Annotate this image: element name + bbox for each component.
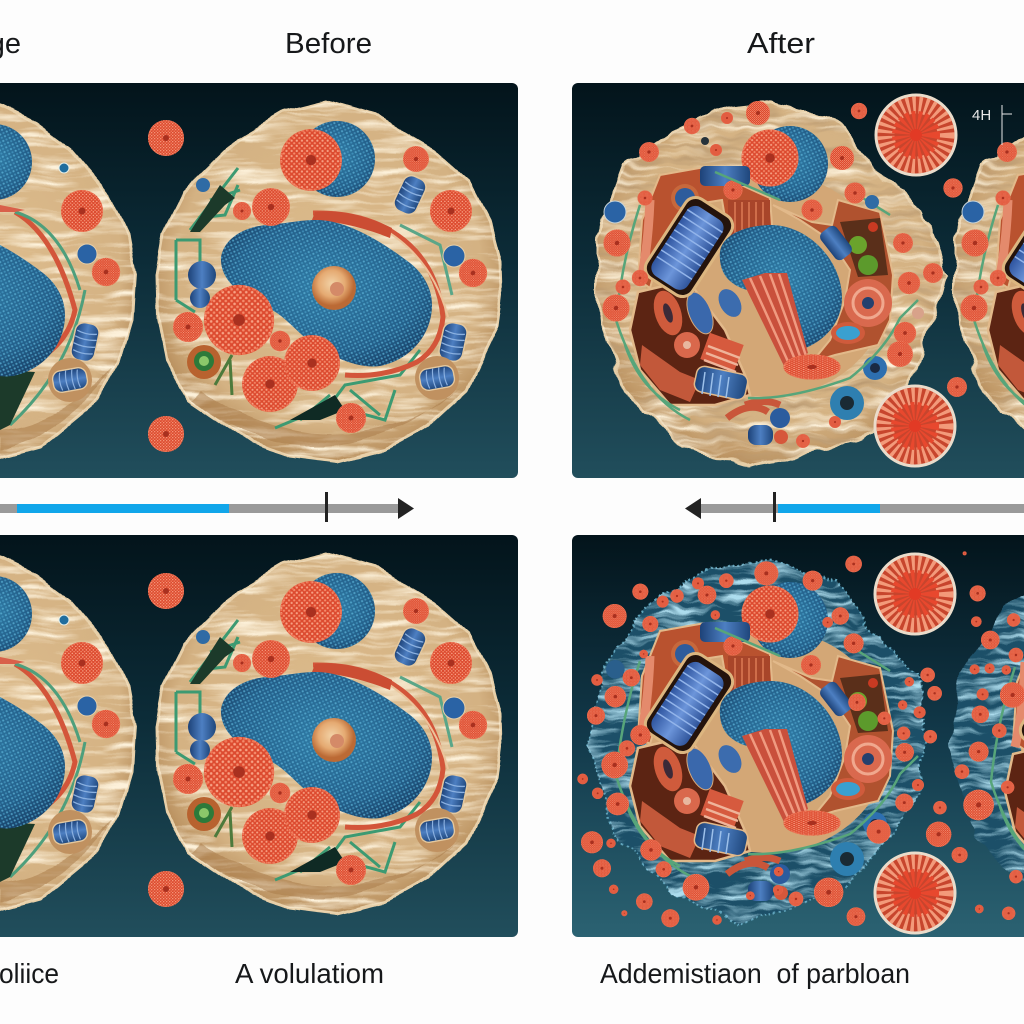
panel: top left before cells bbox=[0, 83, 518, 478]
scattered red particles bbox=[577, 551, 1024, 927]
slider: after timeline bbox=[685, 492, 1024, 522]
panel: bottom left before cells bbox=[0, 535, 518, 937]
slider: before timeline bbox=[0, 492, 414, 522]
heading: After: After bbox=[747, 28, 815, 60]
scale label: 4H bbox=[972, 107, 991, 124]
fibrous halo bbox=[589, 563, 1024, 923]
caption: right: Addemistiaon of parbloan bbox=[600, 958, 910, 989]
caption: partial left: oliice bbox=[0, 958, 59, 989]
panel: top right after cells bbox=[572, 83, 1024, 478]
panel: bottom right after cells with fibres bbox=[572, 535, 1024, 937]
caption: middle: A volulatiom bbox=[235, 958, 384, 989]
heading: Before: Before bbox=[285, 28, 372, 60]
scale label bbox=[972, 105, 1012, 145]
